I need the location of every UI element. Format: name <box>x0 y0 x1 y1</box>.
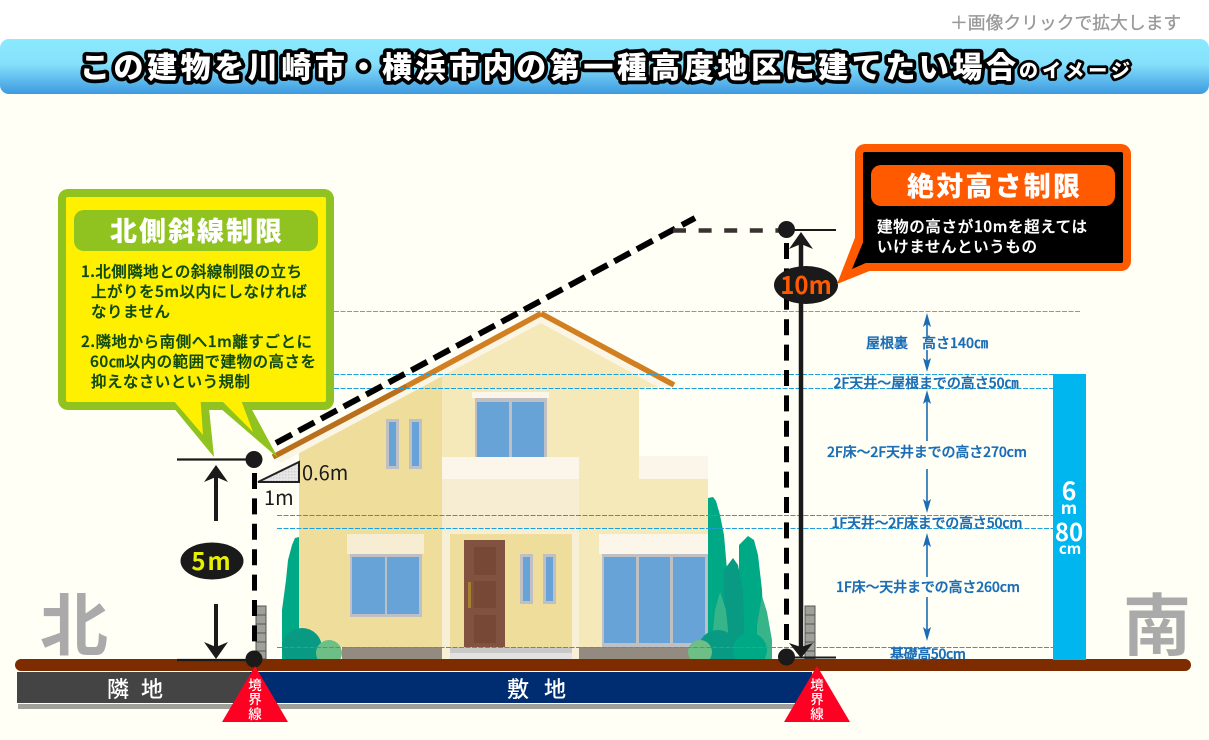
right measurement: 10m: 10m <box>780 266 832 301</box>
height labels: 2F床～2F天井までの高さ270cm <box>827 442 1027 462</box>
height labels <box>827 333 1027 664</box>
callout: north slope restriction: 上がりを5m以内にしなければ <box>91 280 307 302</box>
dashed height guide lines <box>277 374 1053 648</box>
neighbouring land label: 隣地 <box>107 672 163 704</box>
door <box>464 540 505 647</box>
top dashed guide line <box>334 310 1080 312</box>
slope triangle: 0.6m <box>302 457 348 486</box>
house walls <box>299 374 442 647</box>
callout: north slope restriction: 2.隣地から南側へ1m離すごとに <box>81 330 312 352</box>
total height column: 80 <box>1055 513 1083 548</box>
shrubs left <box>282 537 342 668</box>
title text: のイメージ <box>1019 56 1130 83</box>
neighbouring land label <box>17 672 810 709</box>
total height column: cm <box>1059 538 1081 559</box>
south label: 南 <box>1123 571 1191 670</box>
title text: この建物を川崎市・横浜市内の第一種高度地区に建てたい場合 <box>80 43 1016 87</box>
callout: north slope restriction: 北側斜線制限 <box>110 210 282 249</box>
total height column <box>1053 374 1086 660</box>
callout heading <box>74 210 318 251</box>
boundary walls <box>256 606 815 659</box>
height labels: 1F天井～2F床までの高さ50cm <box>832 513 1022 533</box>
callout: north slope restriction: 抑えなさいという規制 <box>91 370 250 392</box>
foundation and steps <box>342 647 442 659</box>
left measurement: 5m: 5m <box>191 542 233 577</box>
height labels: 1F床～天井までの高さ260cm <box>836 577 1020 597</box>
height arrows <box>923 313 931 641</box>
callout: absolute height limit <box>837 144 1131 284</box>
boundary marker left: 線 <box>248 703 262 723</box>
balcony <box>442 457 579 479</box>
left measurement: 5m <box>177 460 254 660</box>
height labels: 屋根裏 高さ140㎝ <box>866 333 988 353</box>
left dashed boundary line <box>252 473 257 650</box>
callout: absolute height limit: いけませんというもの <box>877 235 1037 257</box>
boundary marker left <box>222 666 288 723</box>
height labels: 基礎高50cm <box>890 644 966 664</box>
callout heading <box>871 165 1115 206</box>
enlarge note: ＋画像クリックで拡大します <box>950 9 1181 35</box>
boundary marker left: 界 <box>248 688 262 708</box>
shrubs right <box>688 497 772 670</box>
site label <box>250 672 812 704</box>
callout: north slope restriction: なりません <box>91 300 170 322</box>
left dots <box>246 451 262 668</box>
boundary marker right: 界 <box>810 688 824 708</box>
boundary marker right: 線 <box>810 703 824 723</box>
ground line <box>15 659 1191 671</box>
callout text: 1.北側隣地との斜線制限の立ち <box>81 260 302 282</box>
callout: north slope restriction <box>58 189 334 458</box>
title banner <box>0 39 1209 94</box>
callout text: 建物の高さが10mを超えては <box>877 215 1087 237</box>
boundary marker right <box>784 666 850 723</box>
slope triangle: 1m <box>264 482 294 511</box>
height labels: 2F天井～屋根までの高さ50㎝ <box>834 373 1018 393</box>
north slope limit dashed line <box>276 218 780 443</box>
house <box>273 313 710 659</box>
north label: 北 <box>40 571 108 670</box>
boundary marker left: 境 <box>248 674 262 694</box>
site label: 敷地 <box>507 672 566 704</box>
slope triangle <box>258 457 348 511</box>
total height column: 6 <box>1062 472 1076 508</box>
right measurement: 10m <box>774 221 838 666</box>
callout: north slope restriction: 60㎝以内の範囲で建物の高さを <box>90 350 316 372</box>
window hoods <box>472 392 549 398</box>
windows <box>350 398 708 647</box>
total height column: m <box>1061 494 1077 519</box>
callout: absolute height limit: 絶対高さ制限 <box>907 165 1080 204</box>
boundary marker right: 境 <box>810 674 824 694</box>
porch <box>442 533 579 659</box>
roof <box>273 314 674 457</box>
